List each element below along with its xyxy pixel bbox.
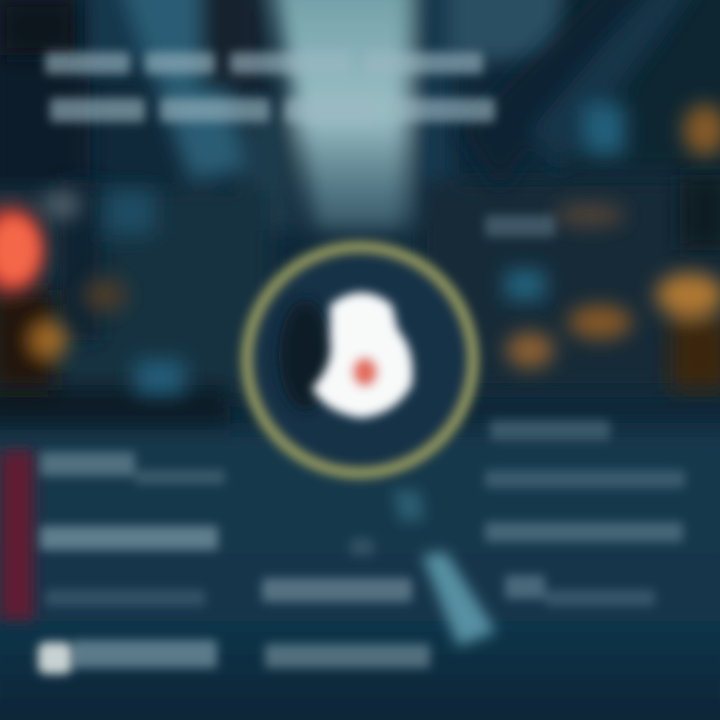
emblem ring <box>247 247 473 473</box>
circular emblem <box>247 247 473 474</box>
title: blurred heading lines <box>45 52 495 122</box>
centre column text lines <box>262 538 430 668</box>
emblem disc <box>248 250 472 474</box>
red edge stripe <box>0 450 34 620</box>
emblem dark left inner <box>279 300 331 410</box>
right column text lines <box>485 215 685 606</box>
left column text lines <box>40 452 225 668</box>
bullet icon: white square <box>38 642 72 674</box>
diagonal light-blue arrow <box>422 552 496 646</box>
red street light <box>0 206 44 294</box>
emblem figure <box>312 292 413 418</box>
